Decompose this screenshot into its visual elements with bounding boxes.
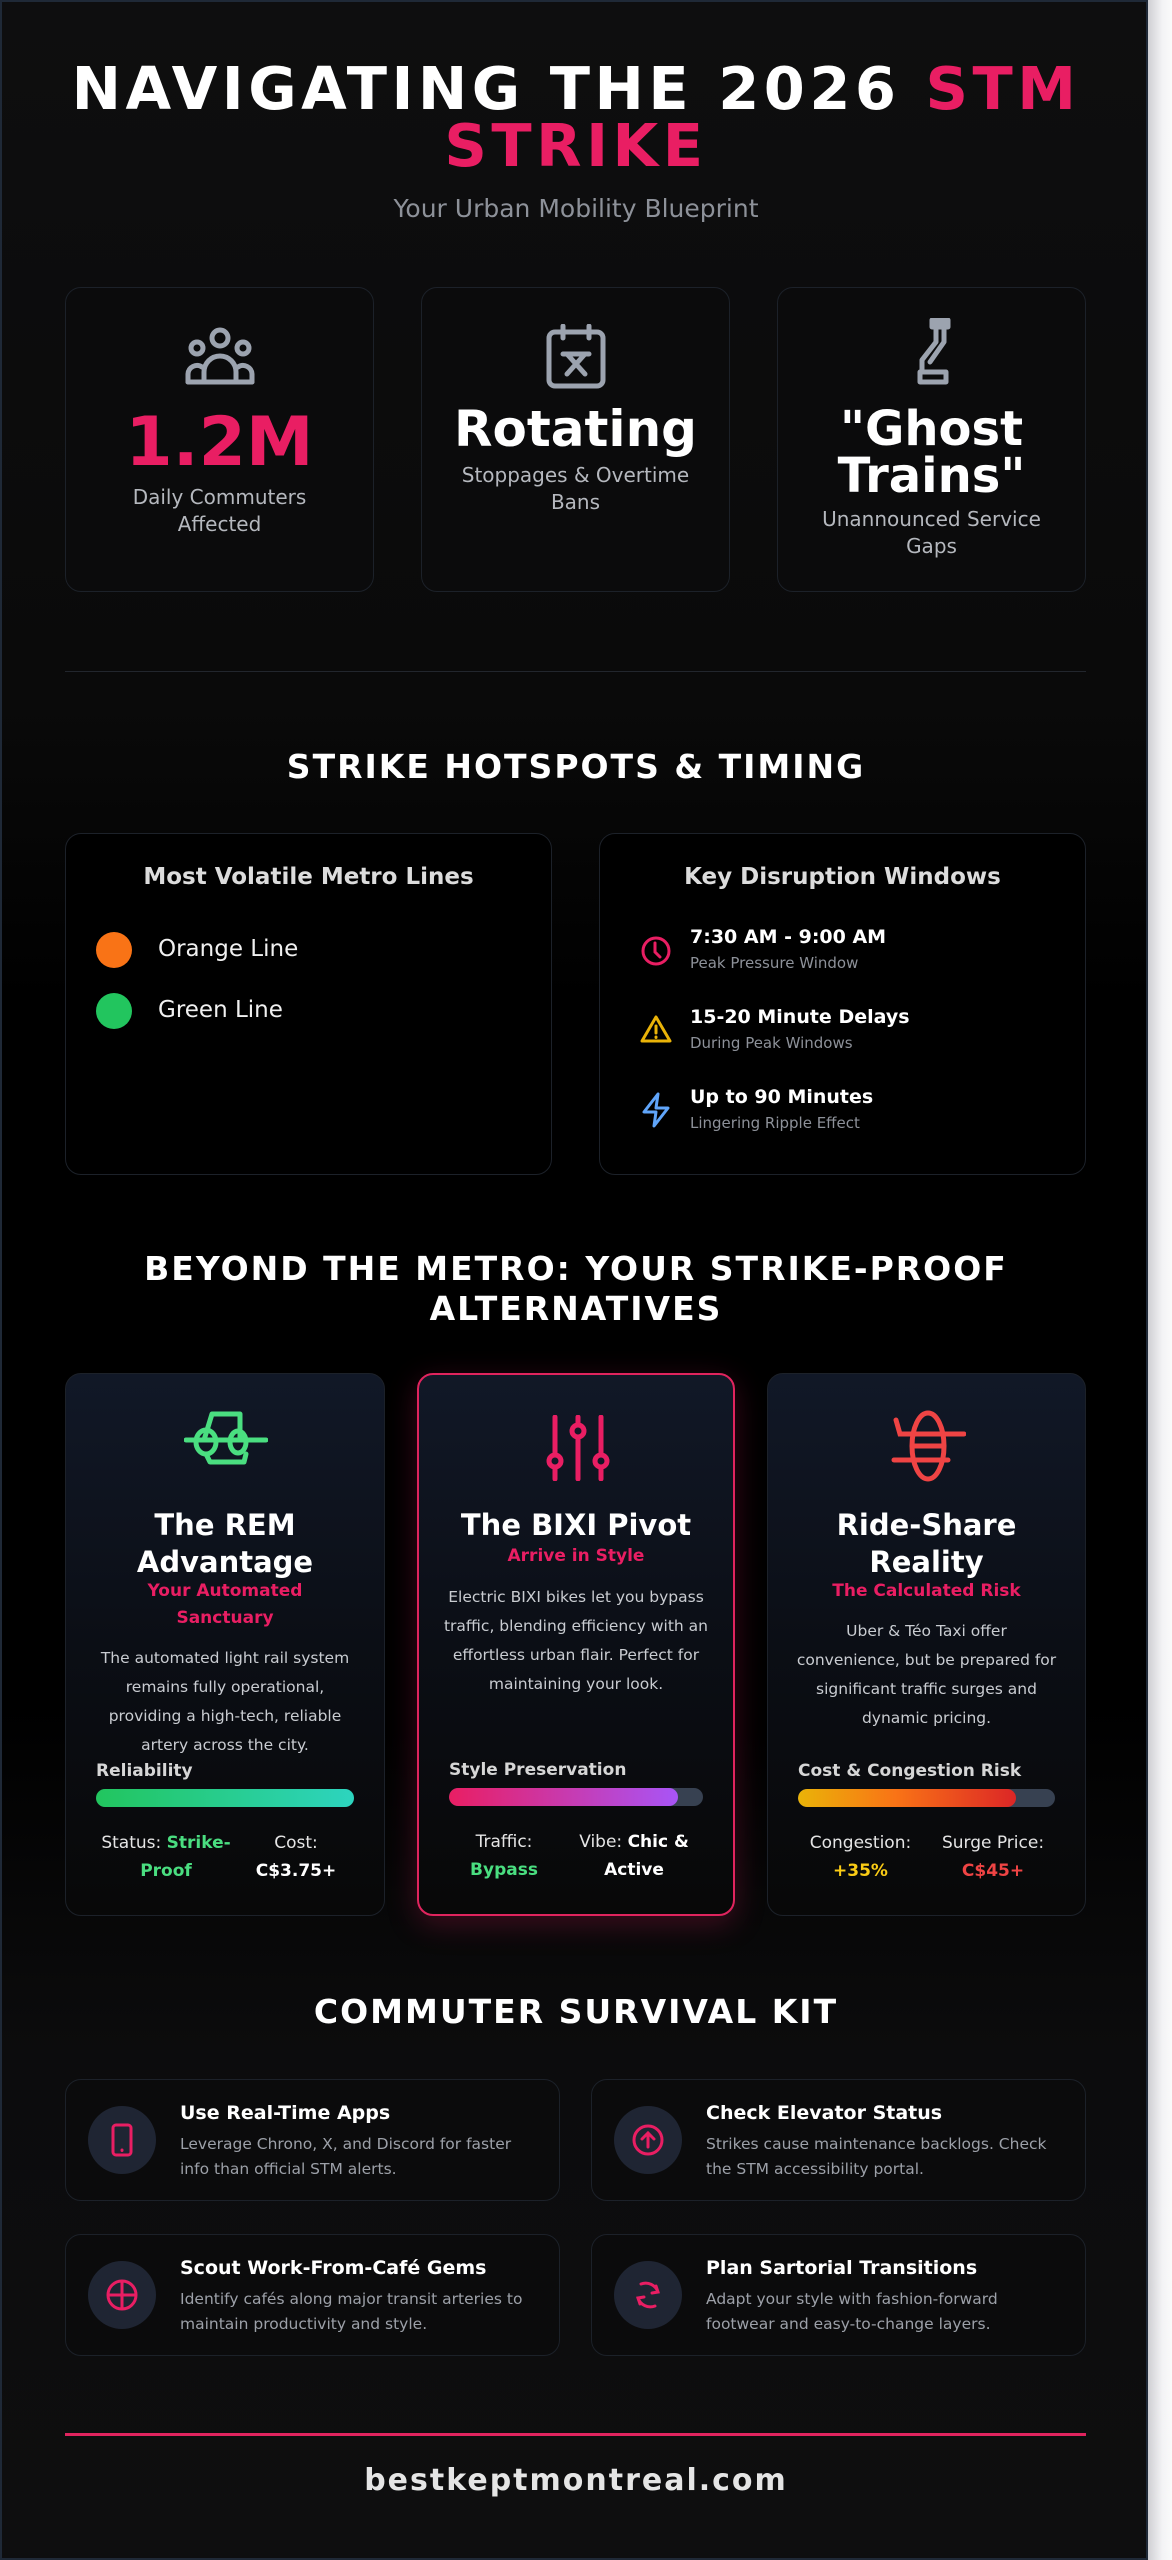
- bar: style: [449, 1760, 703, 1806]
- bar: reliability: Reliability: [96, 1761, 193, 1781]
- stats: Congestion:: [810, 1833, 911, 1853]
- icon: car: [892, 1410, 966, 1482]
- kit: elevator: [591, 2079, 1086, 2201]
- stat value: Trains": [838, 448, 1025, 504]
- stat caption: Stoppages & Overtime Bans: [462, 463, 689, 514]
- description: Electric BIXI bikes let you bypass traffic, blending efficiency with an effortless urban flair. Perfect for maintaining your look.: [444, 1588, 708, 1693]
- stat caption: Unannounced Service Gaps: [822, 507, 1041, 558]
- stats: Cost:: [274, 1833, 318, 1853]
- title: STRIKE: [444, 111, 708, 180]
- card subtitle: The Calculated Risk: [832, 1581, 1021, 1601]
- stat card: commuters: [65, 287, 374, 592]
- heading: alternatives: [144, 1249, 1008, 1328]
- card title: [137, 1508, 313, 1579]
- heading: survival kit: COMMUTER SURVIVAL KIT: [314, 1992, 838, 2031]
- icon: up arrow: [614, 2106, 682, 2174]
- subtitle: Your Urban Mobility Blueprint: [393, 194, 759, 223]
- panel: REM: [65, 1373, 385, 1916]
- stat card: ghost trains: [777, 287, 1086, 592]
- kit: apps: [65, 2079, 560, 2201]
- item: peak window: Peak Pressure Window: [690, 954, 858, 972]
- panel title: Key Disruption Windows: [684, 864, 1001, 890]
- line: green: Green Line: [158, 997, 283, 1023]
- item: ripple: Up to 90 Minutes: [690, 1086, 873, 1108]
- icon: phone: [88, 2106, 156, 2174]
- icon: rail car: [184, 1412, 268, 1464]
- panel: disruption windows: [599, 833, 1086, 1175]
- stats: Bypass: [470, 1860, 538, 1880]
- kit: sartorial: [591, 2234, 1086, 2356]
- bar: cost: Cost & Congestion Risk: [798, 1761, 1021, 1781]
- kit: cafe: Scout Work-From-Café Gems: [180, 2257, 486, 2279]
- stats: Traffic:: [476, 1832, 532, 1852]
- card title: The BIXI Pivot: [461, 1508, 691, 1542]
- kit: elevator: Check Elevator Status: [706, 2102, 942, 2124]
- stats: Surge Price:: [942, 1833, 1044, 1853]
- icon: sliders: [546, 1415, 610, 1481]
- icon: calendar: [546, 324, 606, 388]
- bar: style: Style Preservation: [449, 1760, 626, 1780]
- icon: tube: [918, 318, 950, 384]
- stat card: rotating: [421, 287, 730, 592]
- panel: ride-share: [767, 1373, 1086, 1916]
- stats: [470, 1832, 689, 1880]
- description: The automated light rail system remains fully operational, providing a high-tech, reliable artery across the city.: [101, 1649, 349, 1754]
- panel title: Most Volatile Metro Lines: [143, 864, 474, 890]
- card subtitle: [147, 1581, 302, 1628]
- kit: sartorial: Adapt your style with fashion-forward footwear and easy-to-change layers.: [706, 2290, 998, 2332]
- icon: people: [186, 328, 254, 384]
- bar: cost: [798, 1761, 1055, 1807]
- title: [72, 54, 1080, 180]
- item: ripple: [642, 1086, 873, 1132]
- stats: [810, 1833, 1044, 1881]
- kit: cafe: [65, 2234, 560, 2356]
- card title: [837, 1508, 1016, 1579]
- card subtitle: Arrive in Style: [508, 1546, 644, 1566]
- heading: strike hotspots: STRIKE HOTSPOTS & TIMING: [287, 747, 865, 786]
- stats: Vibe: Chic & Active: [579, 1832, 689, 1880]
- kit: sartorial: Plan Sartorial Transitions: [706, 2257, 977, 2279]
- stats: [101, 1833, 336, 1881]
- bar: reliability: [96, 1761, 354, 1807]
- kit: apps: Leverage Chrono, X, and Discord for faster info than official STM alerts.: [180, 2135, 511, 2178]
- kit: apps: Use Real-Time Apps: [180, 2102, 390, 2124]
- description: Uber & Téo Taxi offer convenience, but be prepared for significant traffic surges and dynamic pricing.: [797, 1622, 1056, 1727]
- card subtitle: Your Automated: [148, 1581, 302, 1601]
- stat value: [838, 401, 1025, 504]
- card title: Ride-Share: [837, 1508, 1016, 1542]
- card title: The REM: [154, 1508, 296, 1542]
- kit: elevator: Strikes cause maintenance backlogs. Check the STM accessibility portal.: [706, 2135, 1046, 2178]
- item: delays: 15-20 Minute Delays: [690, 1006, 910, 1028]
- stat value: "Ghost: [840, 401, 1023, 457]
- kit: cafe: Identify cafés along major transit arteries to maintain productivity and style.: [180, 2290, 522, 2332]
- stats: +35%: [833, 1861, 888, 1881]
- stats: C$45+: [962, 1861, 1024, 1881]
- title: NAVIGATING THE 2026 STM: [72, 54, 1080, 123]
- item: delays: During Peak Windows: [690, 1034, 853, 1052]
- card title: Advantage: [137, 1545, 313, 1579]
- item: peak window: 7:30 AM - 9:00 AM: [690, 926, 886, 948]
- heading: alternatives: BEYOND THE METRO: YOUR STRIKE-PROOF: [144, 1249, 1008, 1288]
- stat caption: Daily Commuters Affected: [133, 485, 306, 536]
- icon: refresh: [614, 2261, 682, 2329]
- stats: Status: Strike-Proof: [101, 1833, 231, 1881]
- panel: BIXI: [417, 1373, 735, 1916]
- line: orange: [96, 932, 298, 968]
- stat value: 1.2M: [125, 403, 314, 482]
- stat value: Rotating: [454, 400, 697, 458]
- item: ripple: Lingering Ripple Effect: [690, 1114, 860, 1132]
- panel: metro lines: [65, 833, 552, 1175]
- icon: globe: [88, 2261, 156, 2329]
- card title: Reality: [869, 1545, 984, 1579]
- line: orange: Orange Line: [158, 936, 298, 962]
- heading: alternatives: ALTERNATIVES: [430, 1289, 722, 1328]
- stats: C$3.75+: [256, 1861, 336, 1881]
- item: peak window: [642, 926, 886, 972]
- item: delays: [640, 1006, 910, 1052]
- card subtitle: Sanctuary: [176, 1608, 274, 1628]
- footer: bestkeptmontreal.com: [364, 2463, 788, 2498]
- line: green: [96, 993, 283, 1029]
